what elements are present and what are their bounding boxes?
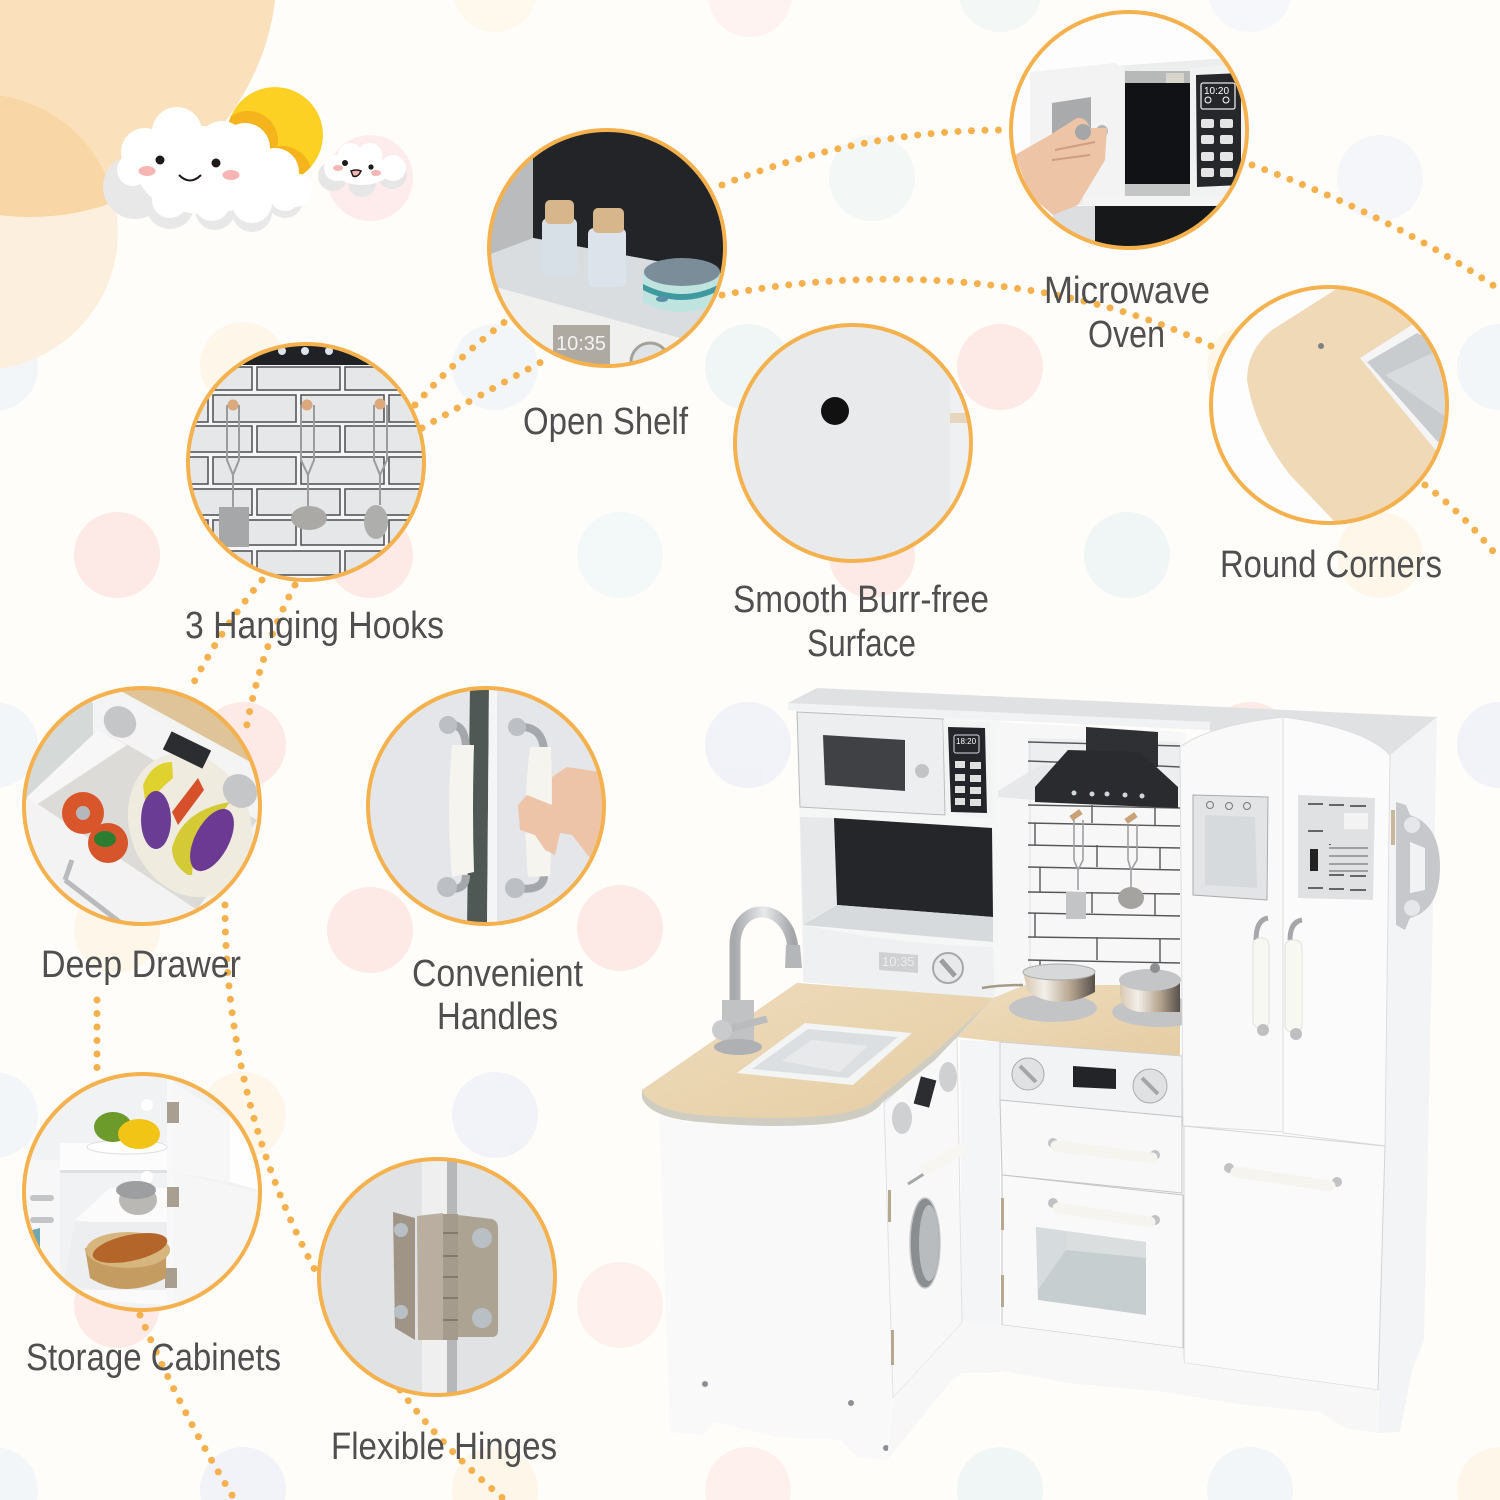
tin can [643, 258, 720, 312]
photo: microwave oven: 10:20 [1204, 86, 1229, 97]
lower corner side [887, 1323, 962, 1460]
feature labels: Storage Cabinets [26, 1337, 281, 1379]
water dispenser [1193, 795, 1268, 900]
display [553, 325, 610, 367]
base plinth [962, 1323, 1378, 1433]
display: 10:35 [556, 333, 606, 355]
oven window [1036, 1227, 1146, 1315]
right countertop [957, 985, 1180, 1056]
fridge control sticker [1298, 795, 1375, 900]
brick wall and range hood [998, 722, 1185, 1005]
oven handle [1048, 1198, 1160, 1225]
photo: convenient handles [370, 690, 602, 922]
photo: storage cabinets [30, 1076, 258, 1308]
fruit and vegetables [62, 762, 243, 878]
icon: large cloud [103, 107, 312, 232]
right handle [505, 718, 552, 898]
feature labels: Round Corners [1220, 544, 1442, 586]
stove burners and pots [982, 963, 1208, 1027]
play kitchen product [642, 688, 1440, 1460]
spatula [219, 507, 249, 547]
drawer handle [1048, 1138, 1160, 1160]
photo: deep drawer [26, 690, 258, 922]
chalkboard and shelf [800, 817, 995, 1000]
photo: hanging hooks [190, 346, 422, 578]
feature labels: Oven [1088, 314, 1165, 356]
photo: round corners [1214, 289, 1445, 521]
salt shaker right [588, 208, 626, 287]
faucet [712, 912, 802, 1055]
side silver handle [1391, 802, 1440, 930]
fridge door handles [1253, 918, 1302, 1040]
right side panel [1378, 717, 1437, 1433]
illustration: sun and clouds [103, 87, 407, 232]
pot [116, 1181, 157, 1215]
feature labels: Smooth Burr-free [733, 579, 989, 621]
hand [1015, 118, 1107, 215]
knobs and panel details [104, 706, 258, 808]
icon: sun [228, 87, 323, 174]
feature labels: Microwave [1044, 270, 1210, 312]
stove control panel [1000, 1042, 1182, 1117]
photo: flexible hinges [321, 1161, 553, 1393]
feature labels: Open Shelf [523, 401, 688, 443]
drawer and oven [1000, 1100, 1183, 1348]
microwave control panel: 18:20 [956, 737, 977, 746]
top board [788, 688, 1437, 755]
feature labels: Deep Drawer [41, 944, 241, 986]
microwave control panel [948, 727, 987, 813]
feature labels: Handles [437, 996, 558, 1038]
feature labels [26, 270, 1442, 1468]
fridge body [1180, 717, 1440, 1146]
washer door [884, 1037, 963, 1398]
upper frame [797, 710, 1000, 1000]
microwave [797, 712, 992, 818]
photo: open shelf [491, 132, 723, 364]
photo: microwave oven [1016, 58, 1245, 246]
hand [518, 767, 602, 858]
spoon [364, 505, 388, 539]
left cabinet [659, 1100, 892, 1460]
feature labels: Convenient [412, 953, 583, 995]
left handle [437, 716, 474, 897]
feature labels: 3 Hanging Hooks [185, 605, 444, 647]
ladle [291, 506, 327, 530]
countertop and sink [642, 983, 993, 1126]
plate with fruit [87, 1112, 167, 1154]
chalkboard and shelf: 10:35 [882, 954, 915, 969]
peach corner shapes [0, 0, 277, 370]
inner column [960, 1040, 1000, 1373]
bread basket [85, 1227, 170, 1289]
icon: small cloud [318, 143, 407, 197]
salt shaker left [542, 200, 577, 246]
feature labels: Surface [807, 623, 916, 665]
feature labels: Flexible Hinges [331, 1426, 557, 1468]
photo: smooth surface [737, 327, 969, 559]
lower fridge cabinet [1184, 1126, 1385, 1390]
